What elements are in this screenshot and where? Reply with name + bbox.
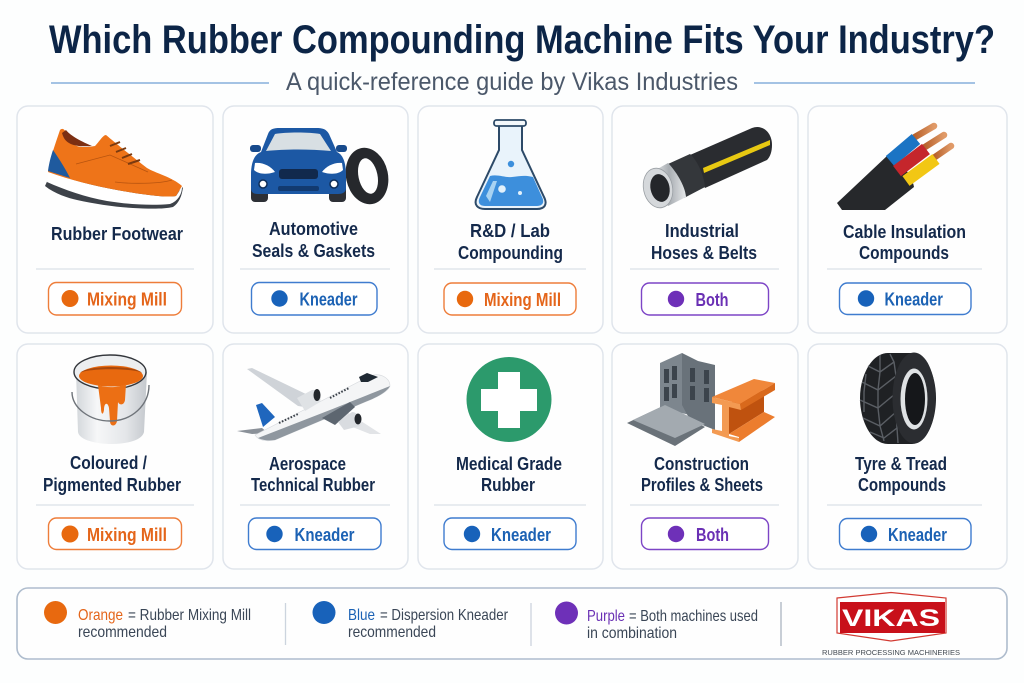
- label: Coloured /: [70, 452, 147, 473]
- badge: Kneader: [248, 518, 381, 550]
- label: Aerospace: [269, 453, 346, 474]
- icon: cable with three wires: [837, 126, 951, 210]
- panel: Industrial Hoses & Belts: [612, 106, 798, 333]
- legend item: purple: = Both machines used: [629, 608, 758, 625]
- label: [251, 453, 375, 495]
- icon: rubber hose: [640, 127, 772, 211]
- badge: Kneader: Kneader: [294, 524, 354, 545]
- label: Construction: [654, 453, 749, 474]
- panel: Coloured / Pigmented Rubber: [17, 344, 213, 569]
- icon: building, slabs and steel beam: [627, 353, 775, 446]
- legend item: purple: [555, 602, 758, 642]
- label: Rubber: [481, 474, 535, 495]
- badge: Mixing Mill: Mixing Mill: [87, 288, 167, 310]
- badge: Kneader: Kneader: [888, 524, 947, 545]
- label: Technical Rubber: [251, 474, 375, 495]
- label: [843, 221, 966, 263]
- label: Profiles & Sheets: [641, 474, 763, 495]
- legend item: orange: = Rubber Mixing Mill: [128, 607, 251, 624]
- label: [641, 453, 763, 495]
- icon: airplane: [237, 368, 390, 441]
- icon: tyre: [860, 352, 936, 444]
- subtitle with rules: A quick-reference guide by Vikas Industries: [286, 68, 738, 96]
- legend item: purple: in combination: [587, 625, 677, 642]
- label: Medical Grade: [456, 453, 562, 474]
- badge: Kneader: Kneader: [491, 524, 551, 545]
- label: Tyre & Tread: [855, 453, 947, 474]
- icon: orange shoe: [45, 129, 183, 209]
- label: [458, 220, 563, 263]
- badge: Mixing Mill: [48, 518, 182, 550]
- label: [651, 220, 757, 263]
- badge: Both: Both: [696, 524, 729, 545]
- badge: Both: [642, 283, 768, 315]
- label: [43, 452, 181, 495]
- label: R&D / Lab: [470, 220, 550, 241]
- logo: Vikas: VIKAS: [842, 605, 940, 632]
- badge: Kneader: [840, 518, 971, 550]
- label: Compounding: [458, 242, 563, 263]
- panel: Construction Profiles & Sheets: [612, 344, 798, 569]
- panel: R&D / Lab Compounding: [418, 106, 603, 333]
- label: Compounds: [858, 474, 946, 495]
- badge: Kneader: Kneader: [884, 288, 943, 310]
- label: Rubber Footwear: [51, 223, 183, 244]
- label: Automotive: [269, 218, 358, 239]
- legend item: blue: [312, 601, 508, 641]
- label: Hoses & Belts: [651, 242, 757, 263]
- label: Pigmented Rubber: [43, 474, 181, 495]
- logo: Vikas: RUBBER PROCESSING MACHINERIES: [822, 648, 960, 657]
- panel: Rubber Footwear: [17, 106, 213, 333]
- badge: Mixing Mill: Mixing Mill: [484, 289, 561, 310]
- panel: Tyre & Tread Compounds: [808, 344, 1007, 569]
- label: Seals & Gaskets: [252, 240, 375, 261]
- badge: Both: [642, 518, 768, 550]
- label: Compounds: [859, 242, 949, 263]
- panel: Automotive Seals & Gaskets: [223, 106, 408, 333]
- label: [456, 453, 562, 495]
- panel: Aerospace Technical Rubber: [223, 344, 408, 569]
- badge: Kneader: [444, 518, 576, 550]
- badge: Kneader: [840, 283, 971, 314]
- legend item: orange: recommended: [78, 624, 167, 641]
- logo: Vikas: [822, 592, 960, 657]
- label: [855, 453, 947, 495]
- legend item: blue: Blue: [348, 607, 375, 624]
- badge: Kneader: Kneader: [300, 288, 358, 310]
- badge: Both: Both: [696, 289, 728, 310]
- panel: Medical Grade Rubber: [418, 344, 603, 569]
- label: [252, 218, 375, 261]
- legend item: orange: Orange: [78, 607, 123, 624]
- legend item: blue: = Dispersion Kneader: [380, 607, 508, 624]
- badge: Kneader: [252, 282, 377, 315]
- icon: blue car and tyre: [250, 128, 393, 208]
- label: Industrial: [665, 220, 739, 241]
- badge: Mixing Mill: [48, 282, 182, 315]
- icon: medical cross: [466, 357, 552, 442]
- legend item: blue: recommended: [348, 624, 436, 641]
- badge: Mixing Mill: [444, 283, 576, 315]
- icon: lab flask: [476, 120, 546, 209]
- panel: Cable Insulation Compounds: [808, 106, 1007, 333]
- icon: paint bucket: [72, 355, 149, 444]
- legend item: orange: [44, 601, 251, 641]
- badge: Mixing Mill: Mixing Mill: [87, 524, 167, 545]
- legend item: purple: Purple: [587, 608, 625, 625]
- label: Cable Insulation: [843, 221, 966, 242]
- panel: legend: [17, 588, 1007, 659]
